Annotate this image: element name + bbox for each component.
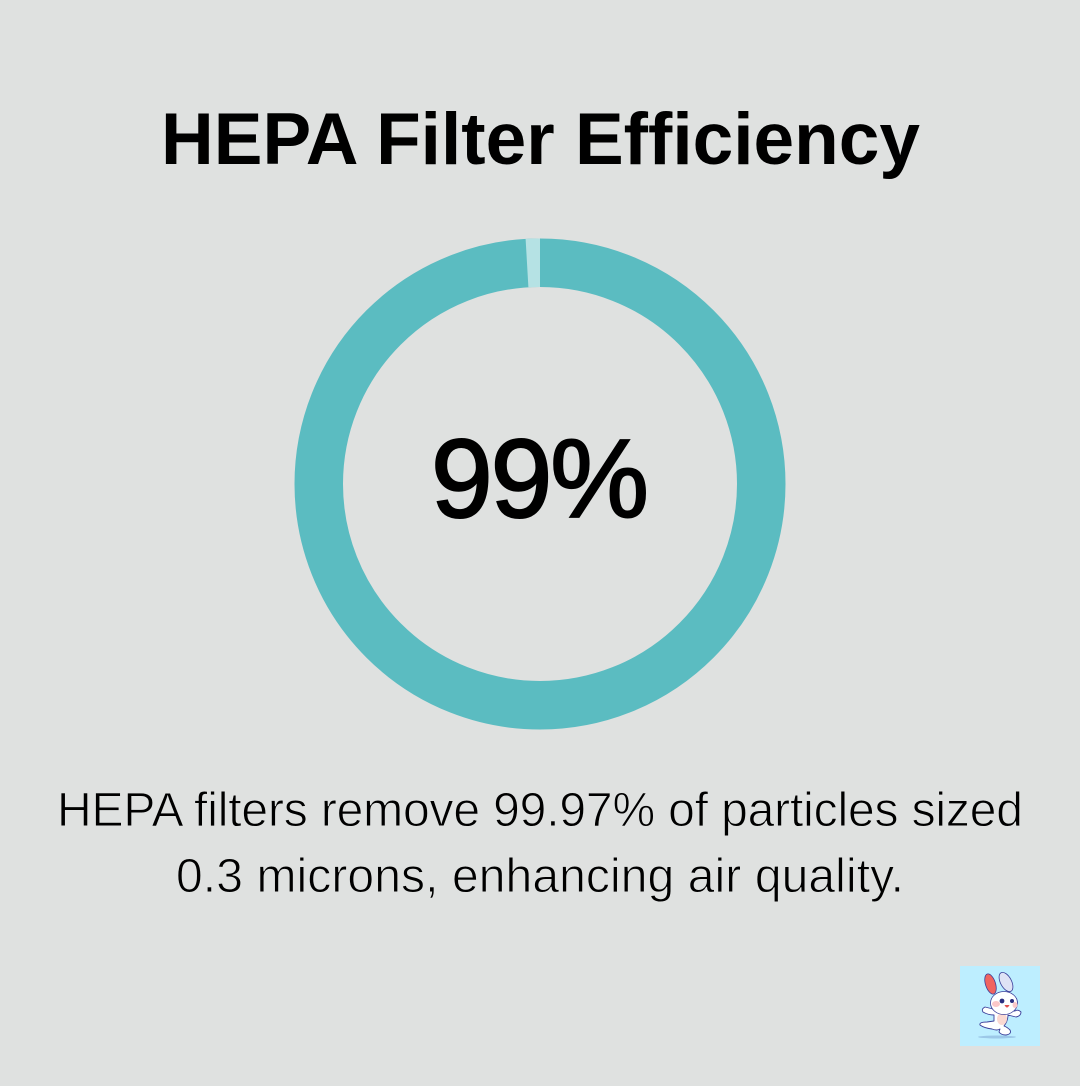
title: HEPA Filter Efficiency — [161, 99, 920, 180]
icon: running bunny logo — [960, 966, 1040, 1046]
description text: 0.3 microns, enhancing air quality. — [176, 850, 904, 903]
description text — [57, 784, 1023, 903]
description text: HEPA filters remove 99.97% of particles sized — [57, 784, 1023, 837]
center value: 99% — [431, 417, 649, 541]
donut chart: 99% — [319, 238, 761, 705]
